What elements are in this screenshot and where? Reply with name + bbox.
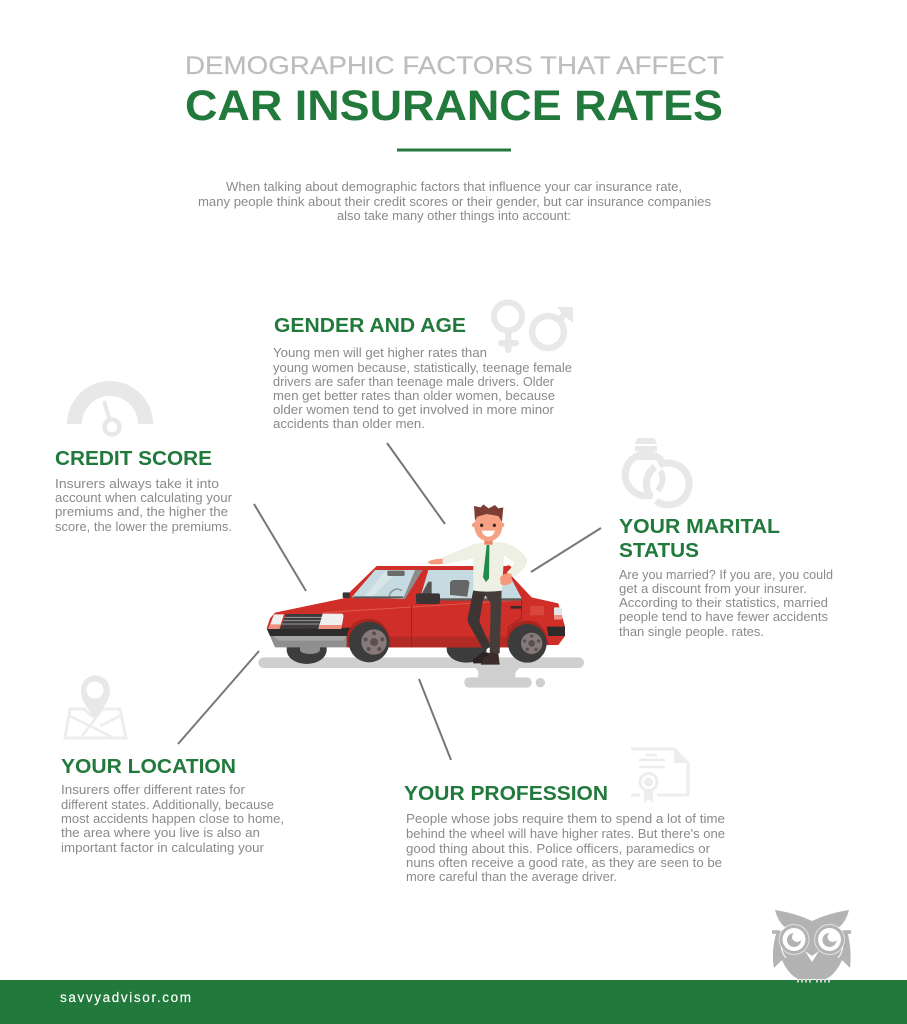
body: profession xyxy=(406,811,725,884)
body: gender and age: Young men will get higher rates than xyxy=(273,345,487,360)
body: marital status: Are you married? If you are, you could xyxy=(619,567,833,582)
title xyxy=(185,52,724,130)
man xyxy=(428,504,527,665)
body: profession: People whose jobs require them to spend a lot of time xyxy=(406,811,725,826)
ground shadow xyxy=(258,657,584,688)
body: marital status: According to their statistics, married xyxy=(619,595,828,610)
heading: your profession: YOUR PROFESSION xyxy=(404,782,608,805)
body: your location: the area where you live is also an xyxy=(61,825,260,840)
body: profession: more careful than the average driver. xyxy=(406,869,617,884)
body: gender and age: young women because, statistically, teenage female xyxy=(273,360,572,375)
intro text xyxy=(198,179,711,223)
body: your location: most accidents happen close to home, xyxy=(61,811,284,826)
footer bar xyxy=(0,980,907,1024)
body: your location xyxy=(61,782,284,855)
icon: rings xyxy=(625,438,689,505)
illustration: man leaning on red car xyxy=(258,504,584,688)
body: gender and age: drivers are safer than teenage male drivers. Older xyxy=(273,374,555,389)
panel: credit score xyxy=(55,381,233,534)
heading: your marital status xyxy=(619,515,780,562)
icon: gauge xyxy=(67,381,153,434)
heading: gender and age: GENDER AND AGE xyxy=(274,314,466,337)
body: credit score: score, the lower the premiums. xyxy=(55,519,232,534)
connector lines xyxy=(178,443,601,760)
body: your location: important factor in calculating your xyxy=(61,840,265,855)
windows xyxy=(343,570,522,604)
title: DEMOGRAPHIC FACTORS THAT AFFECT xyxy=(185,52,724,80)
body: your location: different states. Additionally, because xyxy=(61,797,274,812)
intro text: many people think about their credit scores or their gender, but car insurance companies xyxy=(198,194,711,209)
body: gender and age: older women tend to get involved in more minor xyxy=(273,402,555,417)
title: CAR INSURANCE RATES xyxy=(185,83,723,130)
body: profession: nuns often receive a good rate, as they are seen to be xyxy=(406,855,722,870)
body: gender and age: men get better rates than older women, because xyxy=(273,388,555,403)
body: credit score xyxy=(55,476,233,534)
icon: owl logo xyxy=(772,910,851,981)
body: credit score: premiums and, the higher the xyxy=(55,504,228,519)
heading: your marital status: STATUS xyxy=(619,539,699,562)
heading: your marital status: YOUR MARITAL xyxy=(619,515,780,538)
far wheels xyxy=(287,645,487,664)
icon: map pin xyxy=(65,676,126,738)
body: marital status xyxy=(619,567,833,639)
body: profession: behind the wheel will have higher rates. But there's one xyxy=(406,826,725,841)
panel: marital status xyxy=(619,438,833,639)
panel: gender and age xyxy=(273,302,573,431)
body: profession: good thing about this. Police officers, paramedics or xyxy=(406,841,711,856)
icon: certificate xyxy=(631,749,688,803)
wheels xyxy=(349,622,547,663)
body: marital status: get a discount from your insurer. xyxy=(619,581,807,596)
body: gender and age: accidents than older men. xyxy=(273,416,425,431)
front of car xyxy=(267,614,549,647)
panel: your location xyxy=(61,676,284,855)
footer bar: savvyadvisor.com xyxy=(60,990,191,1005)
body: credit score: Insurers always take it into xyxy=(55,476,219,491)
intro text: When talking about demographic factors that influence your car insurance rate, xyxy=(226,179,682,194)
heading: your location: YOUR LOCATION xyxy=(61,755,236,778)
panel: your profession xyxy=(404,749,725,884)
body: your location: Insurers offer different rates for xyxy=(61,782,246,797)
body: marital status: than single people. rates. xyxy=(619,624,764,639)
heading: credit score: CREDIT SCORE xyxy=(55,447,212,470)
body: gender and age xyxy=(273,345,572,431)
icon: gender symbols xyxy=(494,302,573,353)
body: credit score: account when calculating your xyxy=(55,490,233,505)
car body xyxy=(267,565,565,647)
body: marital status: people tend to have fewer accidents xyxy=(619,609,829,624)
intro text: also take many other things into account: xyxy=(337,208,571,223)
